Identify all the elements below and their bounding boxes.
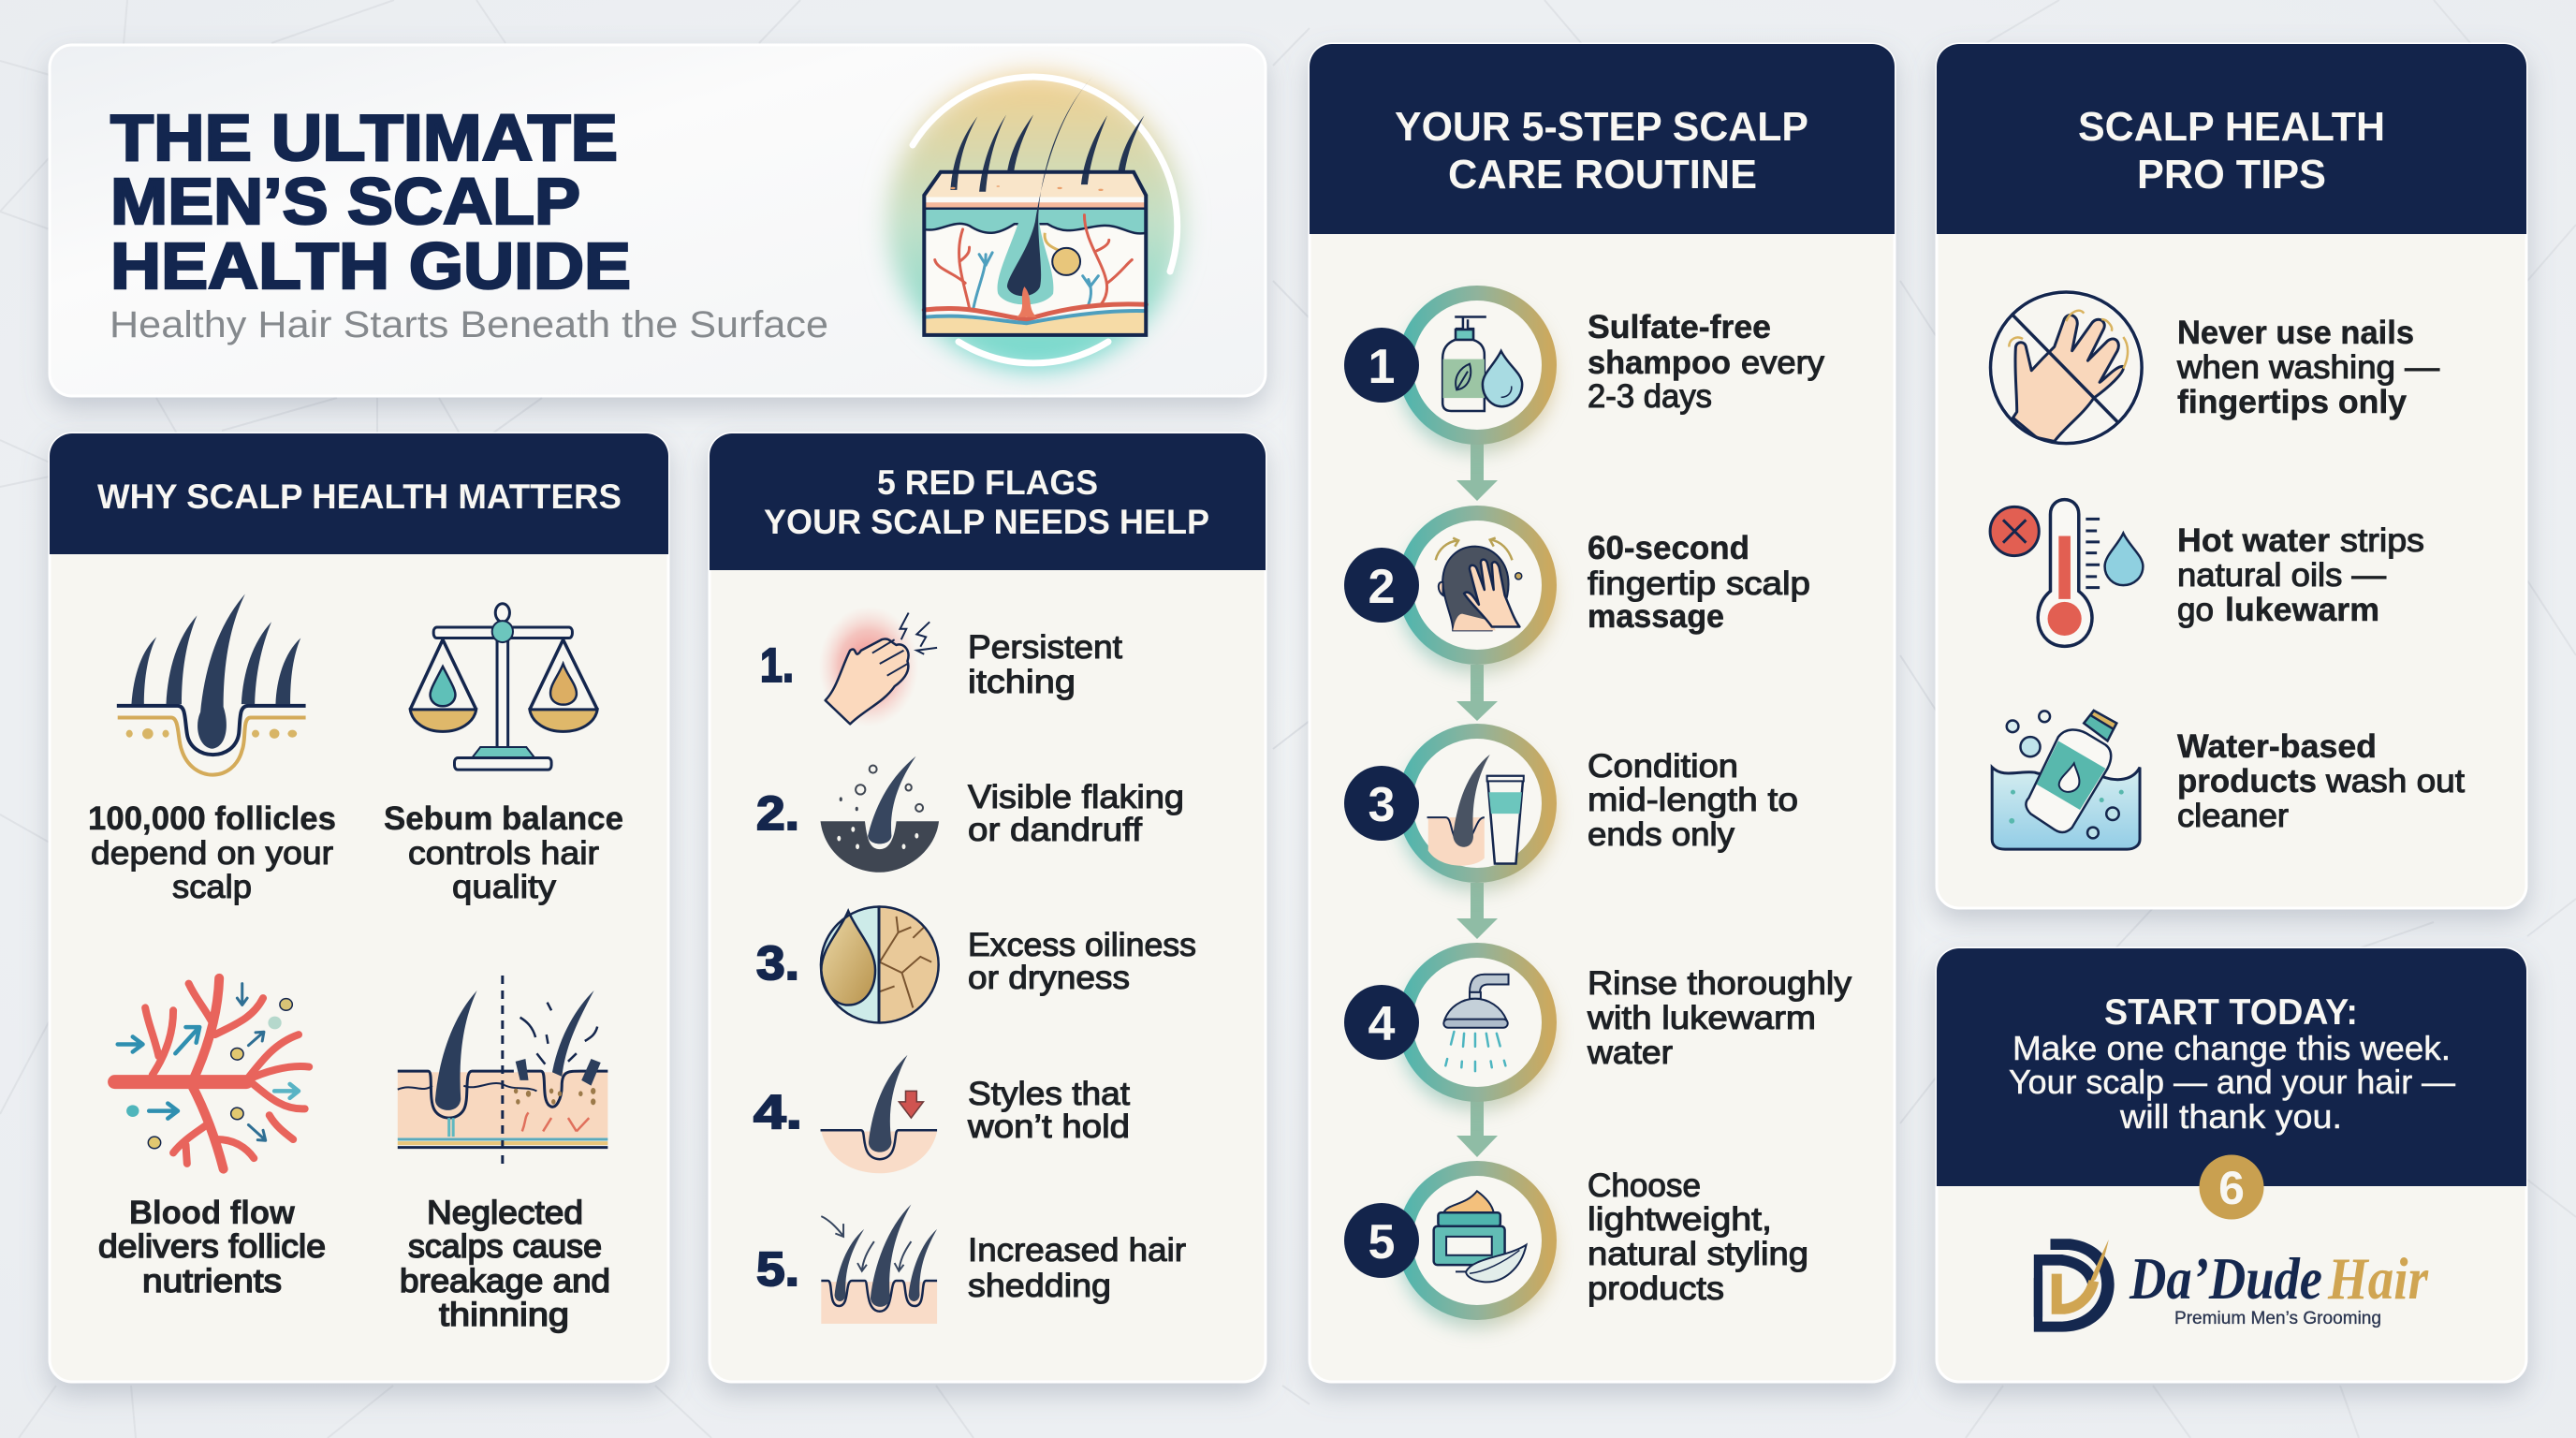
number: 1 bbox=[1368, 340, 1395, 394]
icon: no nails bbox=[1991, 292, 2142, 444]
tip 3 bbox=[1992, 711, 2465, 849]
flag 4: 4. bbox=[754, 1085, 802, 1138]
call to action text: Your scalp — and your hair — bbox=[2009, 1063, 2455, 1101]
heading: YOUR SCALP NEEDS HELP bbox=[764, 503, 1209, 541]
text: neglected: breakage and bbox=[400, 1263, 610, 1299]
header bbox=[1310, 44, 1895, 234]
text: lightweight, bbox=[1588, 1201, 1772, 1238]
panel: pro tips bbox=[1937, 44, 2526, 908]
text bbox=[2176, 315, 2439, 420]
text: strips bbox=[2340, 522, 2424, 559]
icon: scalp cross-section bbox=[887, 74, 1183, 370]
icon: scalp massage bbox=[1436, 538, 1522, 630]
text: fingertips only bbox=[2177, 384, 2408, 420]
icon: water-based bottle bbox=[1992, 711, 2140, 849]
heading: YOUR 5-STEP SCALP bbox=[1395, 104, 1808, 150]
flag 4: Styles that bbox=[968, 1076, 1130, 1112]
text: go bbox=[2177, 592, 2214, 628]
call to action text: START TODAY: bbox=[2104, 992, 2358, 1033]
heading: CARE ROUTINE bbox=[1448, 152, 1757, 198]
ring bbox=[1400, 513, 1554, 673]
panel: why scalp health matters bbox=[50, 433, 668, 1382]
text: sebum: controls hair bbox=[408, 835, 599, 872]
number: 2 bbox=[1368, 560, 1395, 614]
heading: PRO TIPS bbox=[2137, 152, 2326, 198]
text: blood flow bbox=[98, 1195, 326, 1299]
text: neglected bbox=[400, 1195, 610, 1333]
icon: follicles bbox=[117, 594, 306, 775]
tip 2 bbox=[1990, 500, 2424, 646]
number bbox=[1344, 1203, 1419, 1278]
text: Choose bbox=[1588, 1167, 1701, 1204]
flag 1: 1. bbox=[760, 638, 794, 692]
text: neglected: thinning bbox=[439, 1297, 569, 1333]
text: with lukewarm bbox=[1587, 1000, 1816, 1036]
heading: WHY SCALP HEALTH MATTERS bbox=[97, 477, 622, 516]
text: shampoo bbox=[1588, 345, 1731, 381]
logo mark bbox=[2034, 1239, 2115, 1332]
tip 1 bbox=[1991, 292, 2439, 444]
number bbox=[1344, 985, 1419, 1060]
text bbox=[1588, 309, 1825, 415]
text: Rinse thoroughly bbox=[1588, 965, 1852, 1002]
text bbox=[1587, 965, 1852, 1071]
header bbox=[710, 433, 1266, 570]
flag 2: 2. bbox=[756, 786, 799, 840]
text: blood flow: Blood flow bbox=[129, 1195, 296, 1231]
subtitle: Healthy Hair Starts Beneath the Surface bbox=[110, 304, 828, 345]
heading bbox=[2078, 104, 2385, 198]
number: 5 bbox=[1368, 1215, 1395, 1269]
text: follicles bbox=[88, 800, 336, 905]
number bbox=[1344, 766, 1419, 841]
ring bbox=[1400, 731, 1554, 891]
panel: 5 red flags bbox=[710, 433, 1266, 1382]
text: Never use nails bbox=[2177, 315, 2414, 351]
number bbox=[1344, 548, 1419, 623]
arrows between steps bbox=[1456, 444, 1498, 1157]
flag 2: or dandruff bbox=[968, 812, 1142, 848]
icon: thermometer bbox=[1990, 500, 2143, 646]
text: sebum bbox=[384, 800, 623, 905]
title: THE ULTIMATE bbox=[110, 101, 618, 174]
header bbox=[50, 433, 668, 554]
flag 1 bbox=[760, 607, 1122, 726]
text: when washing — bbox=[2176, 349, 2439, 386]
text: lukewarm bbox=[2225, 592, 2379, 628]
text: sebum: quality bbox=[452, 869, 557, 905]
text: products bbox=[1588, 1270, 1724, 1307]
flag 1: Persistent bbox=[968, 629, 1122, 666]
text: water bbox=[1587, 1034, 1673, 1071]
text: Condition bbox=[1588, 748, 1738, 785]
flag 3 bbox=[756, 905, 1196, 1022]
flag 3: or dryness bbox=[968, 960, 1130, 996]
text: products bbox=[2177, 763, 2317, 800]
step 4 bbox=[1344, 950, 1852, 1110]
flag 3: 3. bbox=[756, 936, 799, 990]
text: blood flow: delivers follicle bbox=[98, 1228, 326, 1265]
flag 4: won’t hold bbox=[967, 1108, 1130, 1145]
flag 5: 5. bbox=[756, 1242, 799, 1296]
text: follicles: 100,000 follicles bbox=[88, 800, 336, 837]
flag 5 bbox=[756, 1205, 1186, 1324]
flag 4 bbox=[754, 1055, 1130, 1173]
text: Water-based bbox=[2177, 728, 2377, 765]
panel: start today and logo bbox=[1937, 948, 2526, 1382]
text: ends only bbox=[1588, 816, 1735, 853]
icon: shower bbox=[1443, 975, 1509, 1071]
brand name: Hair bbox=[2327, 1245, 2429, 1312]
flag 2 bbox=[756, 756, 1184, 873]
ring bbox=[1400, 293, 1554, 453]
title bbox=[110, 101, 631, 302]
text: Sulfate-free bbox=[1588, 309, 1771, 345]
flag 5: Increased hair bbox=[968, 1232, 1186, 1269]
heading: SCALP HEALTH bbox=[2078, 104, 2385, 150]
heading: 5 RED FLAGS bbox=[877, 463, 1098, 502]
text bbox=[2177, 728, 2465, 834]
header bbox=[1937, 44, 2526, 234]
icon: conditioner bbox=[1427, 755, 1524, 866]
flag 5: shedding bbox=[968, 1268, 1111, 1304]
icon: styling jar bbox=[1434, 1191, 1527, 1282]
badge: 6 bbox=[2200, 1155, 2263, 1219]
number: 4 bbox=[1368, 997, 1396, 1051]
call to action text bbox=[2009, 992, 2455, 1136]
brand name: Da’Dude bbox=[2129, 1245, 2322, 1312]
logo bbox=[2034, 1239, 2429, 1332]
number bbox=[1344, 328, 1419, 403]
heading bbox=[1395, 104, 1808, 198]
text: Hot water bbox=[2177, 522, 2330, 559]
icon: healthy vs neglected scalp bbox=[398, 976, 607, 1167]
ring bbox=[1400, 950, 1554, 1110]
text: mid-length to bbox=[1588, 782, 1798, 818]
text: cleaner bbox=[2177, 798, 2289, 834]
text bbox=[1588, 530, 1810, 635]
text: neglected: Neglected bbox=[427, 1195, 583, 1231]
ring bbox=[1400, 1168, 1554, 1328]
text: follicles: depend on your bbox=[91, 835, 333, 872]
step 5 bbox=[1344, 1167, 1808, 1328]
title: MEN’S SCALP bbox=[110, 165, 580, 238]
text bbox=[2177, 522, 2424, 628]
text: massage bbox=[1588, 598, 1724, 635]
icon: shampoo bottle bbox=[1442, 317, 1522, 411]
flag 1: itching bbox=[968, 664, 1076, 700]
step 1 bbox=[1344, 293, 1825, 453]
badge: 6: 6 bbox=[2218, 1162, 2245, 1214]
icon: blood flow bbox=[115, 978, 309, 1169]
text: 60-second bbox=[1588, 530, 1749, 566]
tagline: Premium Men’s Grooming bbox=[2174, 1309, 2381, 1328]
text: follicles: scalp bbox=[172, 869, 252, 905]
flag 2: Visible flaking bbox=[968, 779, 1184, 815]
step 2 bbox=[1344, 513, 1810, 673]
header bbox=[1937, 948, 2526, 1186]
flag 3: Excess oiliness bbox=[968, 927, 1196, 963]
text: natural oils — bbox=[2177, 557, 2386, 594]
text: fingertip scalp bbox=[1588, 565, 1810, 602]
text: blood flow: nutrients bbox=[142, 1263, 282, 1299]
text: wash out bbox=[2325, 763, 2465, 800]
icon: sebum scales bbox=[410, 604, 597, 770]
text bbox=[1588, 748, 1798, 853]
number: 3 bbox=[1368, 778, 1395, 832]
call to action text: will thank you. bbox=[2119, 1097, 2342, 1136]
step 3 bbox=[1344, 731, 1798, 891]
text bbox=[1588, 1167, 1808, 1307]
text: every bbox=[1741, 345, 1825, 381]
title: HEALTH GUIDE bbox=[110, 229, 631, 302]
text: neglected: scalps cause bbox=[408, 1228, 602, 1265]
text: 2-3 days bbox=[1588, 378, 1712, 415]
panel: hero title card bbox=[50, 45, 1266, 396]
call to action text: Make one change this week. bbox=[2012, 1029, 2451, 1067]
text: sebum: Sebum balance bbox=[384, 800, 623, 837]
heading bbox=[764, 463, 1209, 541]
text: natural styling bbox=[1588, 1236, 1808, 1272]
panel: 5-step routine bbox=[1310, 44, 1895, 1382]
